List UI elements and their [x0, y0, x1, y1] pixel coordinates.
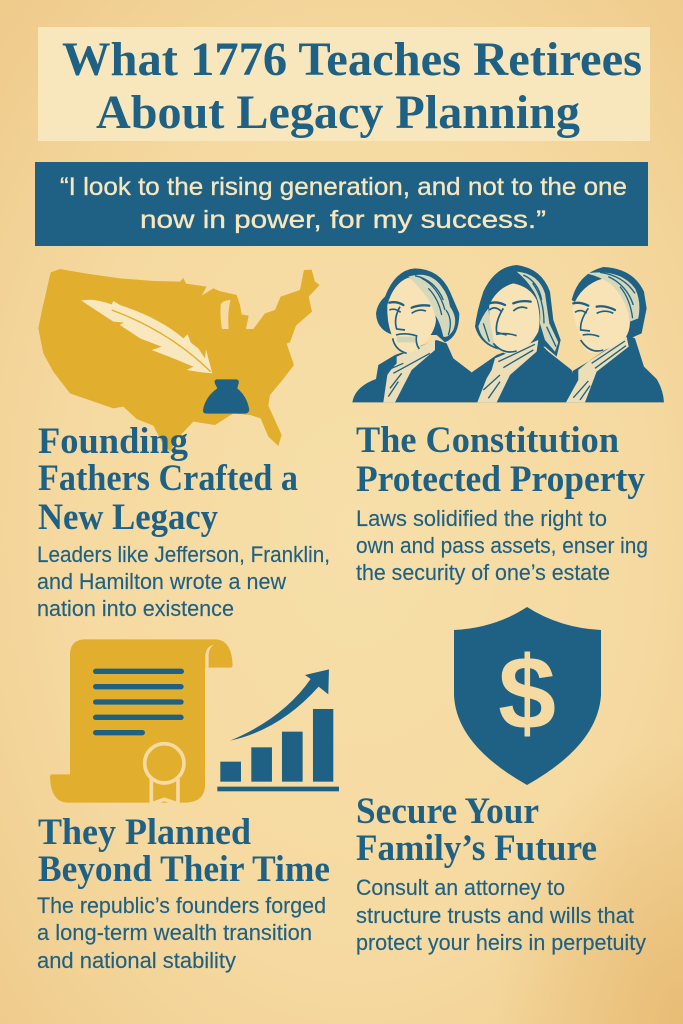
text: secure future: protect your heirs in perpetuity	[356, 930, 646, 955]
text: planned beyond: The republic’s founders forged	[37, 893, 326, 918]
text: constitution: the security of one’s estate	[356, 560, 610, 585]
text: secure future	[356, 875, 646, 955]
heading: founding fathers: New Legacy	[38, 496, 218, 537]
icon: inkwell	[203, 379, 249, 414]
heading: founding fathers	[38, 420, 298, 537]
heading: planned beyond: They Planned	[38, 811, 251, 852]
heading: planned beyond: Beyond Their Time	[38, 848, 330, 889]
heading: secure future: Secure Your	[356, 790, 539, 831]
title: About Legacy Planning	[96, 86, 580, 139]
seal	[145, 744, 184, 804]
text: constitution	[356, 506, 648, 585]
text: planned beyond: a long-term wealth transition	[37, 920, 312, 945]
quote banner	[35, 162, 648, 246]
text: constitution: Laws solidified the right to	[356, 506, 607, 531]
heading: constitution: The Constitution	[356, 419, 619, 460]
text: secure future: Consult an attorney to	[356, 875, 565, 900]
text: secure future: structure trusts and wills that	[356, 903, 634, 928]
text: planned beyond	[37, 893, 326, 973]
document lines	[93, 669, 184, 735]
title: What 1776 Teaches Retirees	[62, 33, 642, 86]
title	[38, 27, 650, 141]
icon: shield with dollar sign: $	[498, 636, 556, 752]
icon: three founders portraits	[352, 265, 664, 402]
portrait: Franklin	[472, 265, 580, 402]
icon: shield with dollar sign	[454, 607, 601, 785]
text: constitution: own and pass assets, enser ing	[356, 533, 648, 558]
heading: founding fathers: Founding	[38, 420, 188, 461]
text: planned beyond: and national stability	[37, 948, 236, 973]
heading: constitution	[356, 419, 645, 499]
text: founding fathers: and Hamilton wrote a new	[37, 569, 286, 594]
portrait: Hamilton	[566, 267, 664, 402]
icon: US map with quill and inkwell	[38, 269, 320, 452]
heading: secure future	[356, 790, 597, 868]
icon: quill	[81, 300, 212, 373]
heading: secure future: Family’s Future	[356, 827, 597, 868]
quote banner: now in power, for my success.”	[140, 206, 546, 234]
text: founding fathers: nation into existence	[37, 596, 234, 621]
text: founding fathers: Leaders like Jefferson, Franklin,	[37, 542, 330, 567]
heading: planned beyond	[38, 811, 330, 889]
portrait: Jefferson	[352, 268, 480, 402]
text: founding fathers	[37, 542, 330, 621]
heading: constitution: Protected Property	[356, 458, 645, 499]
icon: scroll with seal	[50, 639, 233, 804]
heading: founding fathers: Fathers Crafted a	[38, 457, 298, 498]
quote banner: “I look to the rising generation, and not to the one	[60, 173, 627, 201]
icon: growth bar chart with arrow	[217, 669, 339, 791]
